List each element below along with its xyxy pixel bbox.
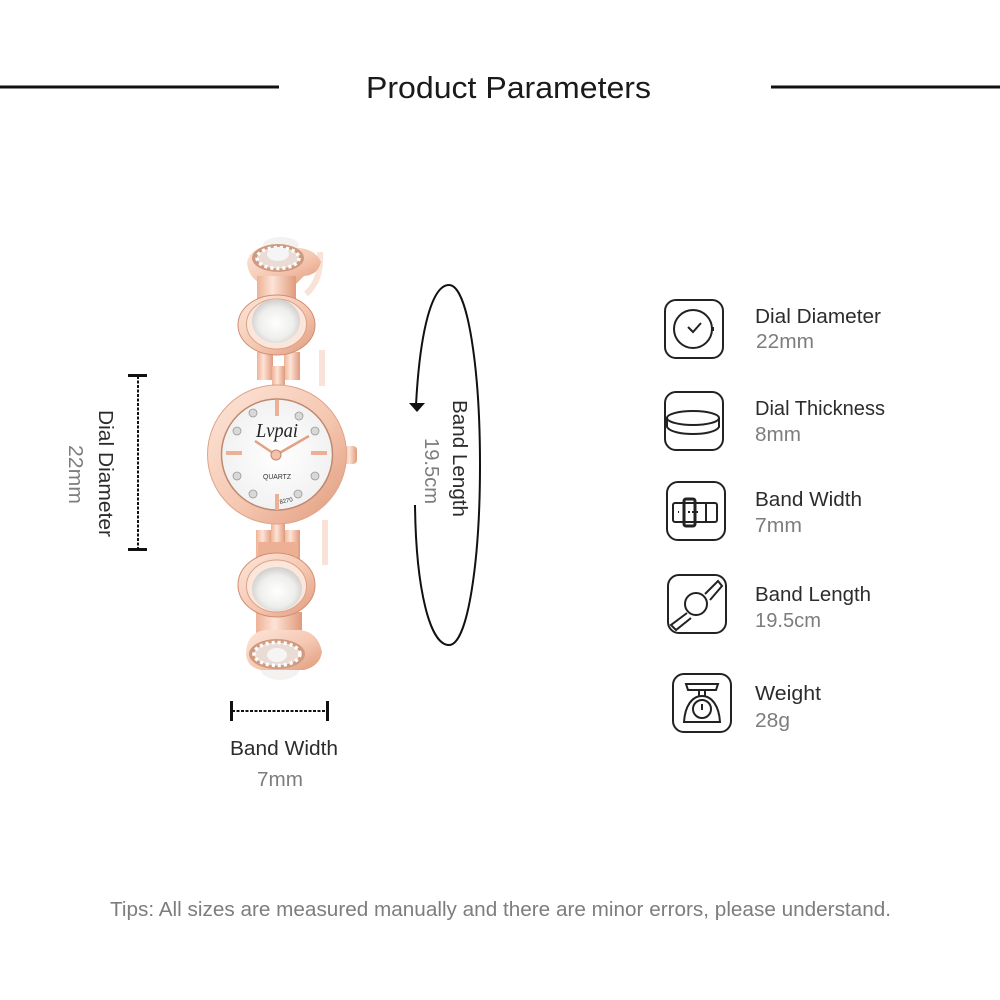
parameter: band length [755, 584, 871, 632]
top pearl stub [263, 237, 299, 253]
top rhinestone link [247, 244, 321, 284]
hour markers [226, 400, 327, 510]
hands [255, 436, 309, 455]
tips note: Tips: All sizes are measured manually and there are minor errors, please understand. [110, 899, 891, 921]
band width label [230, 738, 338, 791]
parameter: band width: 7mm [755, 515, 802, 537]
crystals [233, 409, 319, 498]
brand: Lvpai [255, 420, 298, 442]
dial diameter label: Dial Diameter [94, 410, 116, 537]
crown [344, 446, 357, 464]
parameter: dial diameter [755, 306, 881, 353]
band length label: 19.5cm [420, 438, 442, 504]
upper links [257, 276, 300, 390]
dial diameter label [64, 410, 116, 537]
bottom rhinestone link [246, 630, 322, 670]
back band [306, 252, 325, 565]
parameter: band width: Band Width [755, 489, 862, 511]
parameter: band width [755, 489, 862, 537]
parameter: dial thickness: 8mm [755, 424, 801, 446]
band length arrow [409, 285, 480, 645]
lower pearl [238, 553, 315, 617]
quartz label: QUARTZ [263, 474, 292, 481]
parameter: band length: Band Length [755, 584, 871, 606]
parameter: weight [755, 683, 821, 732]
bottom pearl stub [260, 656, 300, 680]
watch illustration [208, 237, 357, 680]
lower links [256, 520, 302, 642]
icon: band width [667, 482, 725, 540]
parameter: weight: Weight [755, 683, 821, 705]
icon: band length [668, 575, 726, 633]
band width bracket [230, 701, 329, 721]
upper pearl [238, 295, 315, 355]
dial: 8270 [279, 497, 294, 506]
band width label: 7mm [257, 769, 303, 791]
icon: dial thickness [665, 392, 723, 450]
icon: dial diameter [665, 300, 723, 358]
dial diameter bracket [128, 374, 147, 551]
dial diameter label: 22mm [64, 445, 86, 504]
parameter: weight: 28g [755, 710, 790, 732]
title: Product Parameters [366, 70, 651, 105]
band width label: Band Width [230, 738, 338, 760]
parameter: dial diameter: 22mm [756, 331, 814, 353]
parameter: dial thickness: Dial Thickness [755, 398, 885, 420]
parameter: dial thickness [755, 398, 885, 446]
band length label [420, 400, 470, 517]
icon: weight scale [673, 674, 731, 732]
parameter: band length: 19.5cm [755, 610, 821, 632]
parameter: dial diameter: Dial Diameter [755, 306, 881, 328]
band length label: Band Length [448, 400, 470, 517]
dial [208, 385, 346, 524]
title [0, 70, 1000, 105]
